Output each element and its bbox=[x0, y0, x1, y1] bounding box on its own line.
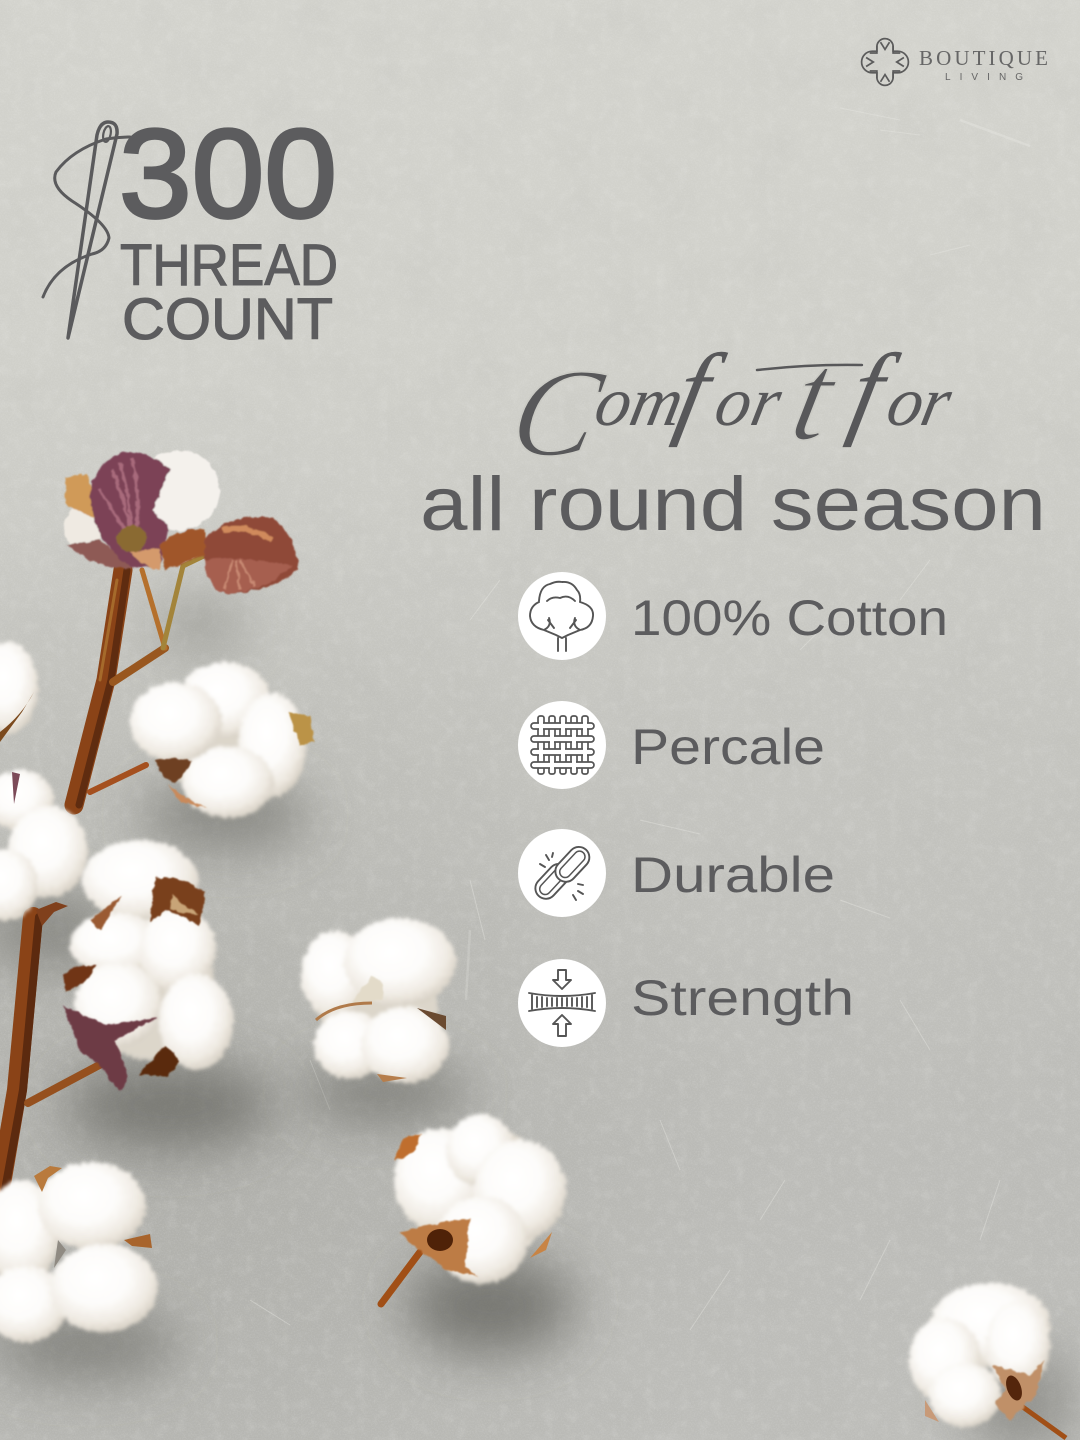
script heading line bbox=[500, 326, 967, 483]
script heading line: f bbox=[667, 332, 733, 448]
feature: percale bbox=[518, 701, 825, 789]
cotton boll: bottom left bbox=[0, 1162, 158, 1342]
number 300: 300 bbox=[119, 103, 337, 244]
cotton boll: centre bbox=[301, 918, 456, 1083]
dried bud bbox=[204, 517, 298, 594]
feature list bbox=[518, 572, 948, 1047]
label THREAD: THREAD bbox=[120, 233, 338, 298]
icon: chain link bbox=[531, 843, 594, 903]
cotton boll: bottom right with stem bbox=[909, 1283, 1066, 1438]
feature: percale: Percale bbox=[631, 719, 825, 775]
cotton boll: lower centre with stem bbox=[381, 1114, 566, 1304]
script heading line: f bbox=[841, 332, 907, 448]
soft shadows under cotton bolls bbox=[0, 595, 1075, 1440]
logo wordmark: BOUTIQUE bbox=[919, 46, 1048, 70]
logo icon: quatrefoil knot bbox=[862, 39, 908, 85]
cotton boll: right of branch bbox=[130, 662, 314, 818]
sans heading line: all round season bbox=[420, 462, 1046, 547]
script heading line: o bbox=[709, 364, 760, 441]
script heading line: r bbox=[915, 364, 959, 441]
script heading line: t bbox=[781, 326, 849, 467]
feature: durable bbox=[518, 829, 835, 917]
feature: 100% cotton bbox=[518, 572, 948, 660]
script heading line: r bbox=[745, 364, 789, 441]
icon: cotton boll bbox=[530, 582, 593, 651]
cotton boll: mid left edge bbox=[0, 770, 88, 926]
heading bbox=[420, 326, 1046, 547]
label COUNT: COUNT bbox=[122, 287, 333, 352]
main branch bbox=[0, 552, 212, 1190]
script heading line: C bbox=[500, 342, 616, 483]
dried cotton flower at top of branch bbox=[64, 450, 298, 594]
script heading line: o bbox=[881, 364, 932, 441]
feature: strength: Strength bbox=[631, 970, 854, 1026]
cotton boll: lower cluster bbox=[63, 840, 233, 1092]
feature: strength bbox=[518, 959, 854, 1047]
cotton boll: upper left edge bbox=[0, 642, 38, 742]
logo: Boutique Living bbox=[862, 39, 1048, 85]
icon: woven fabric bbox=[531, 716, 594, 774]
icon: needle and thread bbox=[43, 122, 130, 338]
feature: durable: Durable bbox=[631, 847, 835, 903]
icon: compression arrows bbox=[529, 970, 595, 1036]
thread count badge bbox=[43, 103, 338, 352]
logo subline: LIVING bbox=[945, 72, 1023, 83]
script heading line: om bbox=[589, 364, 691, 441]
feature: 100% cotton: 100% Cotton bbox=[631, 590, 948, 646]
